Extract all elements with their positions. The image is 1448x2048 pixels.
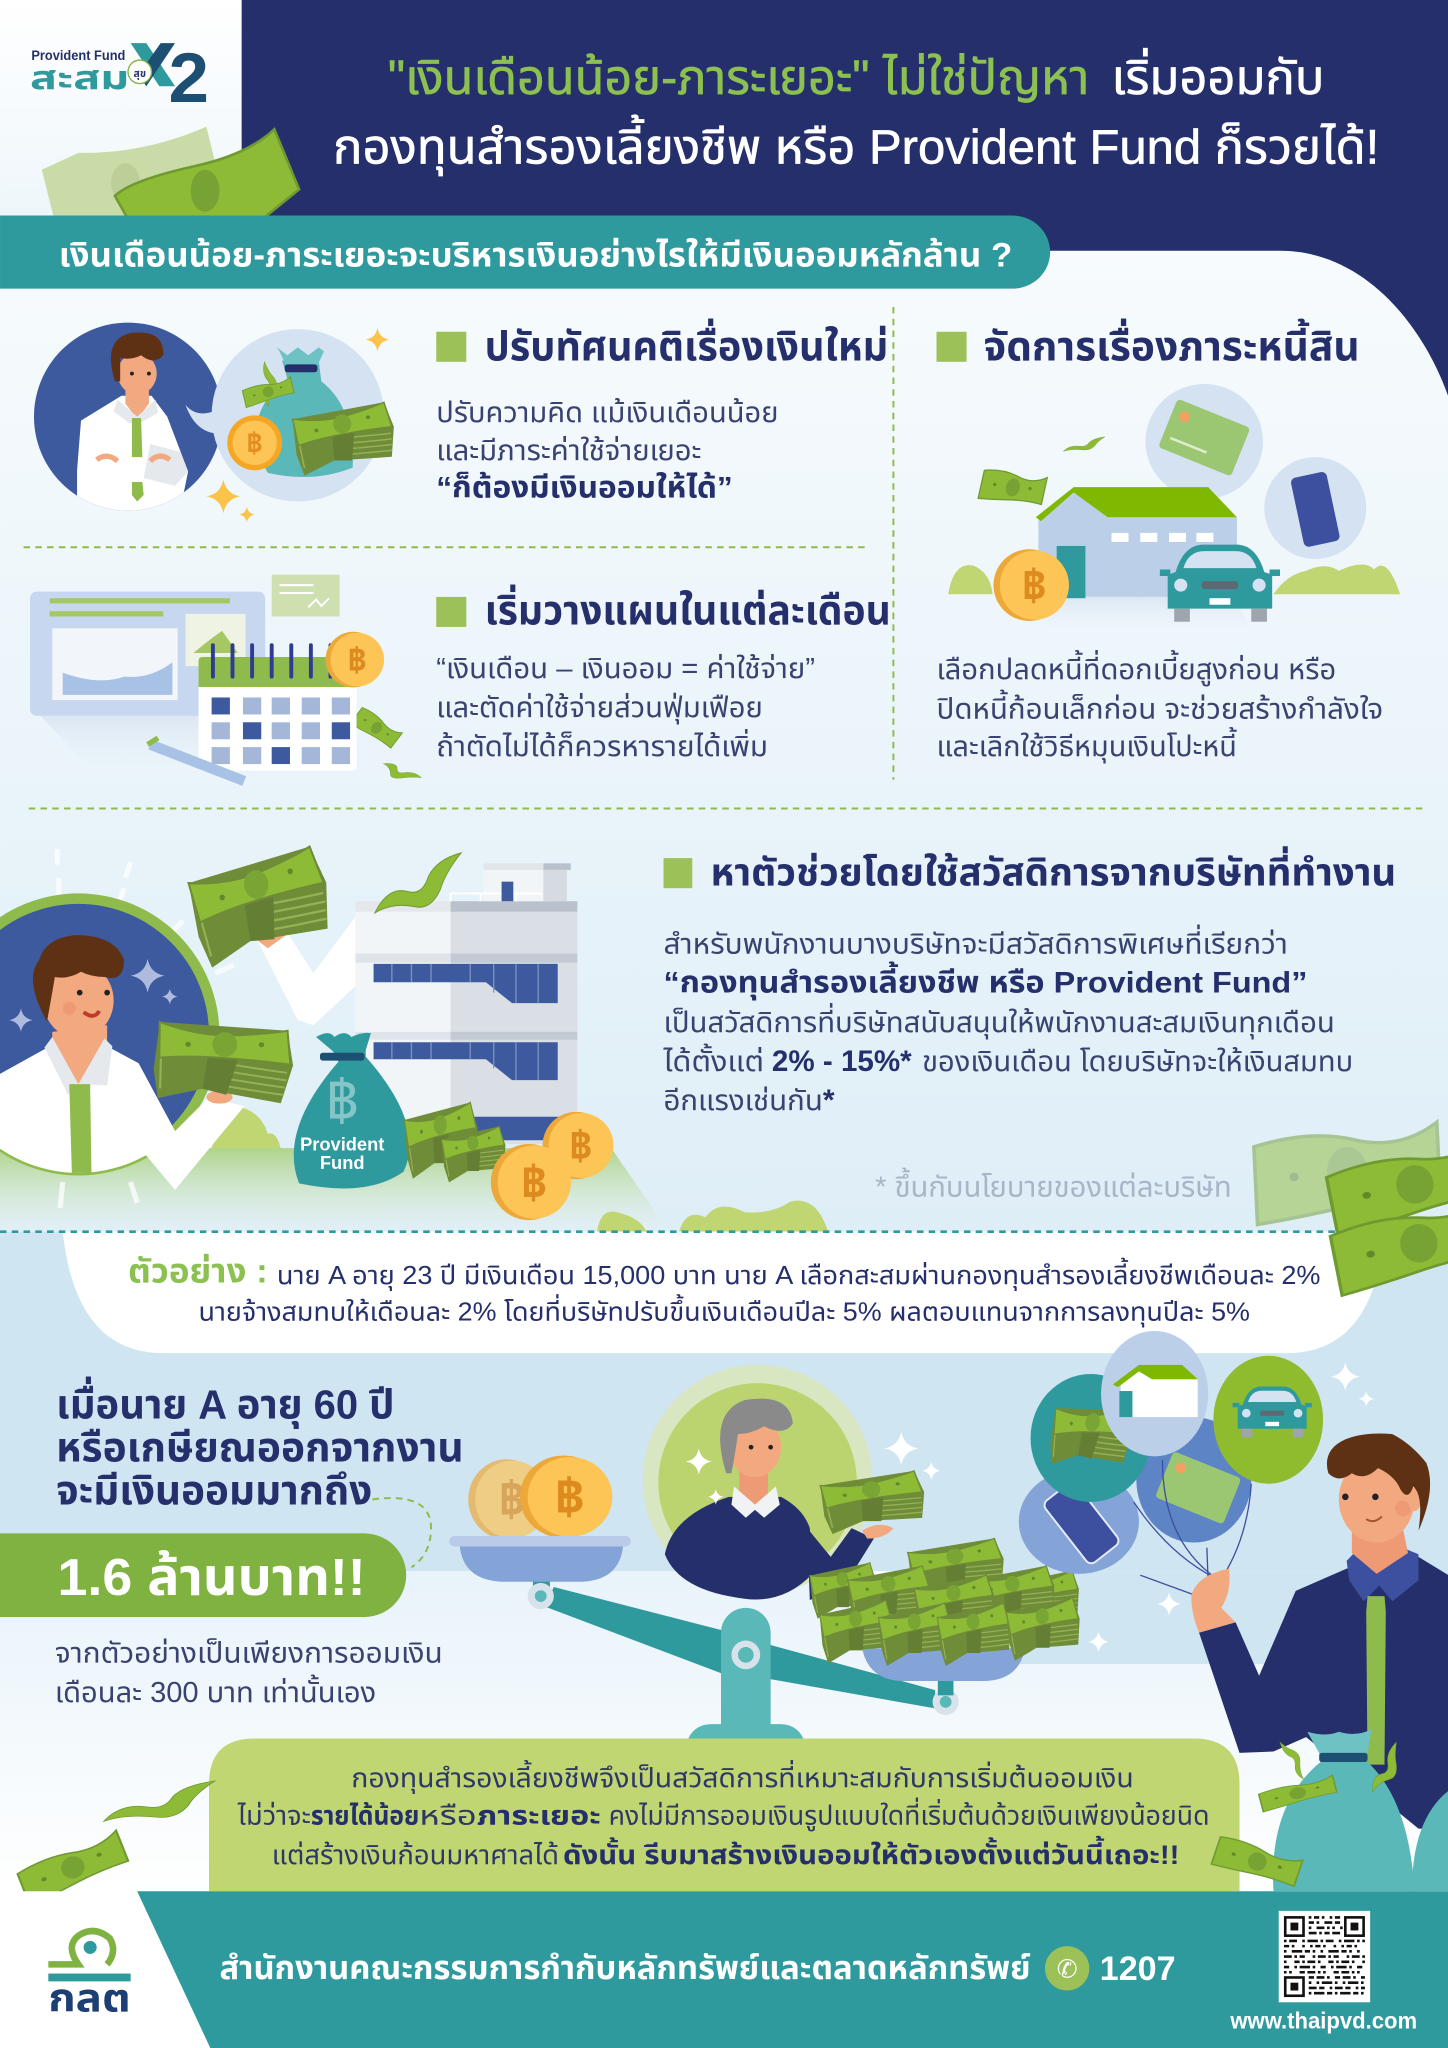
text: mindset: “ก็ต้องมีเงินออมให้ได้” [436, 471, 733, 505]
heading: company welfare: หาตัวช่วยโดยใช้สวัสดิการจากบริษัทที่ทำงาน [711, 845, 1396, 895]
title: เริ่มออมกับ [1112, 48, 1324, 105]
footer band: www.thaipvd.com [1229, 2007, 1417, 2033]
amount pill [0, 1533, 406, 1617]
result heading: หรือเกษียณออกจากงาน [56, 1425, 464, 1471]
text: company welfare: * [823, 1084, 835, 1117]
illustration: man thinking with money bag: ฿ [246, 428, 263, 460]
illustration: planning calendar and dashboard [30, 575, 421, 788]
illustration: balance scale with retired man [449, 1365, 1080, 1738]
footer band [0, 1891, 1448, 2048]
example panel: นายจ้างสมทบให้เดือนละ 2% โดยที่บริษัทปรับขึ้นเงินเดือนปีละ 5% ผลตอบแทนจากการลงทุนปีละ 5% [199, 1293, 1250, 1327]
text: company welfare: ของเงินเดือน โดยบริษัทจะให้เงินสมทบ [922, 1046, 1353, 1078]
title: "เงินเดือนน้อย-ภาระเยอะ" ไม่ใช่ปัญหา [388, 51, 1089, 105]
closing message panel: หรือ [419, 1801, 477, 1831]
illustration: employee, building and provident fund bag: Fund [320, 1152, 365, 1173]
sec logo [48, 1931, 131, 2020]
text: debt: และเลิกใช้วิธีหมุนเงินโปะหนี้ [937, 727, 1237, 763]
text: company welfare: เป็นสวัสดิการที่บริษัทสนับสนุนให้พนักงานสะสมเงินทุกเดือน [664, 1003, 1335, 1039]
text: debt: ปิดหนี้ก้อนเล็กก่อน จะช่วยสร้างกำลังใจ [937, 689, 1383, 725]
banknotes right [1254, 1122, 1448, 1296]
result heading: จะมีเงินออมมากถึง [56, 1468, 372, 1514]
header money [42, 127, 217, 222]
illustration: employee, building and provident fund bag [0, 845, 828, 1232]
closing message panel: คงไม่มีการออมเงินรูปแบบใดที่เริ่มต้นด้วยเงินเพียงน้อยนิด [609, 1798, 1209, 1832]
logo: สุข [134, 69, 146, 80]
text: company welfare: “กองทุนสำรองเลี้ยงชีพ หรือ Provident Fund” [664, 961, 1307, 1001]
savings note: จากตัวอย่างเป็นเพียงการออมเงิน [55, 1638, 443, 1670]
closing message panel: กองทุนสำรองเลี้ยงชีพจึงเป็นสวัสดิการที่เหมาะสมกับการเริ่มต้นออมเงิน [351, 1760, 1134, 1794]
footer band: 1207 [1100, 1950, 1176, 1988]
closing message panel: แต่สร้างเงินก้อนมหาศาลได้ [272, 1840, 559, 1870]
illustration: house, car, card, phone [948, 384, 1400, 633]
QR code [1279, 1911, 1370, 2002]
example panel [0, 1232, 1385, 1353]
text: mindset: ปรับความคิด แม้เงินเดือนน้อย [436, 397, 778, 429]
header money bright [115, 129, 299, 217]
savings note: เดือนละ 300 บาท เท่านั้นเอง [55, 1675, 376, 1709]
logo: สะสม [30, 59, 129, 96]
text: plan: “เงินเดือน – เงินออม = ค่าใช้จ่าย” [436, 653, 815, 685]
closing message panel: ดังนั้น รีบมาสร้างเงินออมให้ตัวเองตั้งแต่วันนี้เถอะ!! [563, 1836, 1179, 1870]
amount pill: 1.6 ล้านบาท!! [57, 1549, 366, 1607]
closing message panel [209, 1738, 1240, 1891]
result heading [56, 1376, 464, 1514]
illustration: man thinking with money bag [34, 323, 394, 522]
heading: mindset: ปรับทัศนคติเรื่องเงินใหม่ [485, 318, 888, 369]
money bags and falling notes bottom [14, 1729, 1448, 1907]
text: mindset [436, 397, 778, 505]
example panel: ตัวอย่าง : [128, 1253, 268, 1291]
savings note [55, 1638, 443, 1709]
text: company welfare: ได้ตั้งแต่ [662, 1044, 764, 1078]
question band [0, 216, 1050, 289]
closing message panel: รายได้น้อย [311, 1801, 419, 1831]
example panel: นาย A อายุ 23 ปี มีเงินเดือน 15,000 บาท นาย A เลือกสะสมผ่านกองทุนสำรองเลี้ยงชีพเดือนละ 2% [277, 1257, 1321, 1291]
title: กองทุนสำรองเลี้ยงชีพ หรือ Provident Fund ก็รวยได้! [333, 114, 1379, 176]
text: company welfare: 2% - 15%* [772, 1045, 912, 1078]
text: debt: เลือกปลดหนี้ที่ดอกเบี้ยสูงก่อน หรือ [937, 650, 1336, 687]
heading: debt: จัดการเรื่องภาระหนี้สิน [984, 318, 1360, 369]
footer band: ✆ [1057, 1956, 1078, 1983]
illustration: employee, building and provident fund bag: Provident [300, 1134, 384, 1155]
text: debt [937, 650, 1383, 763]
closing message panel: ไม่ว่าจะ [237, 1801, 311, 1831]
logo: 2 [169, 38, 209, 117]
sec logo: กลต [48, 1977, 131, 2020]
text: plan: ถ้าตัดไม่ได้ก็ควรหารายได้เพิ่ม [436, 729, 768, 763]
text: mindset: และมีภาระค่าใช้จ่ายเยอะ [436, 435, 701, 467]
result heading: เมื่อนาย A อายุ 60 ปี [56, 1376, 394, 1429]
illustration: employee, building and provident fund bag: ฿ [325, 1070, 359, 1134]
title [333, 48, 1379, 176]
question band: เงินเดือนน้อย-ภาระเยอะจะบริหารเงินอย่างไรให้มีเงินออมหลักล้าน ? [59, 236, 1012, 274]
heading: plan: เริ่มวางแผนในแต่ละเดือน [485, 585, 891, 633]
footer band: สำนักงานคณะกรรมการกำกับหลักทรัพย์และตลาดหลักทรัพย์ [219, 1949, 1031, 1986]
illustration: man with balloons [1019, 1331, 1448, 1829]
text: company welfare [662, 924, 1353, 1117]
text: plan: และตัดค่าใช้จ่ายส่วนฟุ่มเฟือย [436, 692, 763, 724]
closing message panel: ภาระเยอะ [477, 1801, 601, 1831]
logo: Provident Fund [31, 48, 125, 63]
footnote: * ขึ้นกับนโยบายของแต่ละบริษัท [875, 1167, 1232, 1203]
text: company welfare: สำหรับพนักงานบางบริษัทจะมีสวัสดิการพิเศษที่เรียกว่า [664, 924, 1288, 960]
text: company welfare: อีกแรงเช่นกัน [664, 1085, 823, 1117]
logo [30, 38, 209, 117]
text: plan [436, 653, 815, 763]
